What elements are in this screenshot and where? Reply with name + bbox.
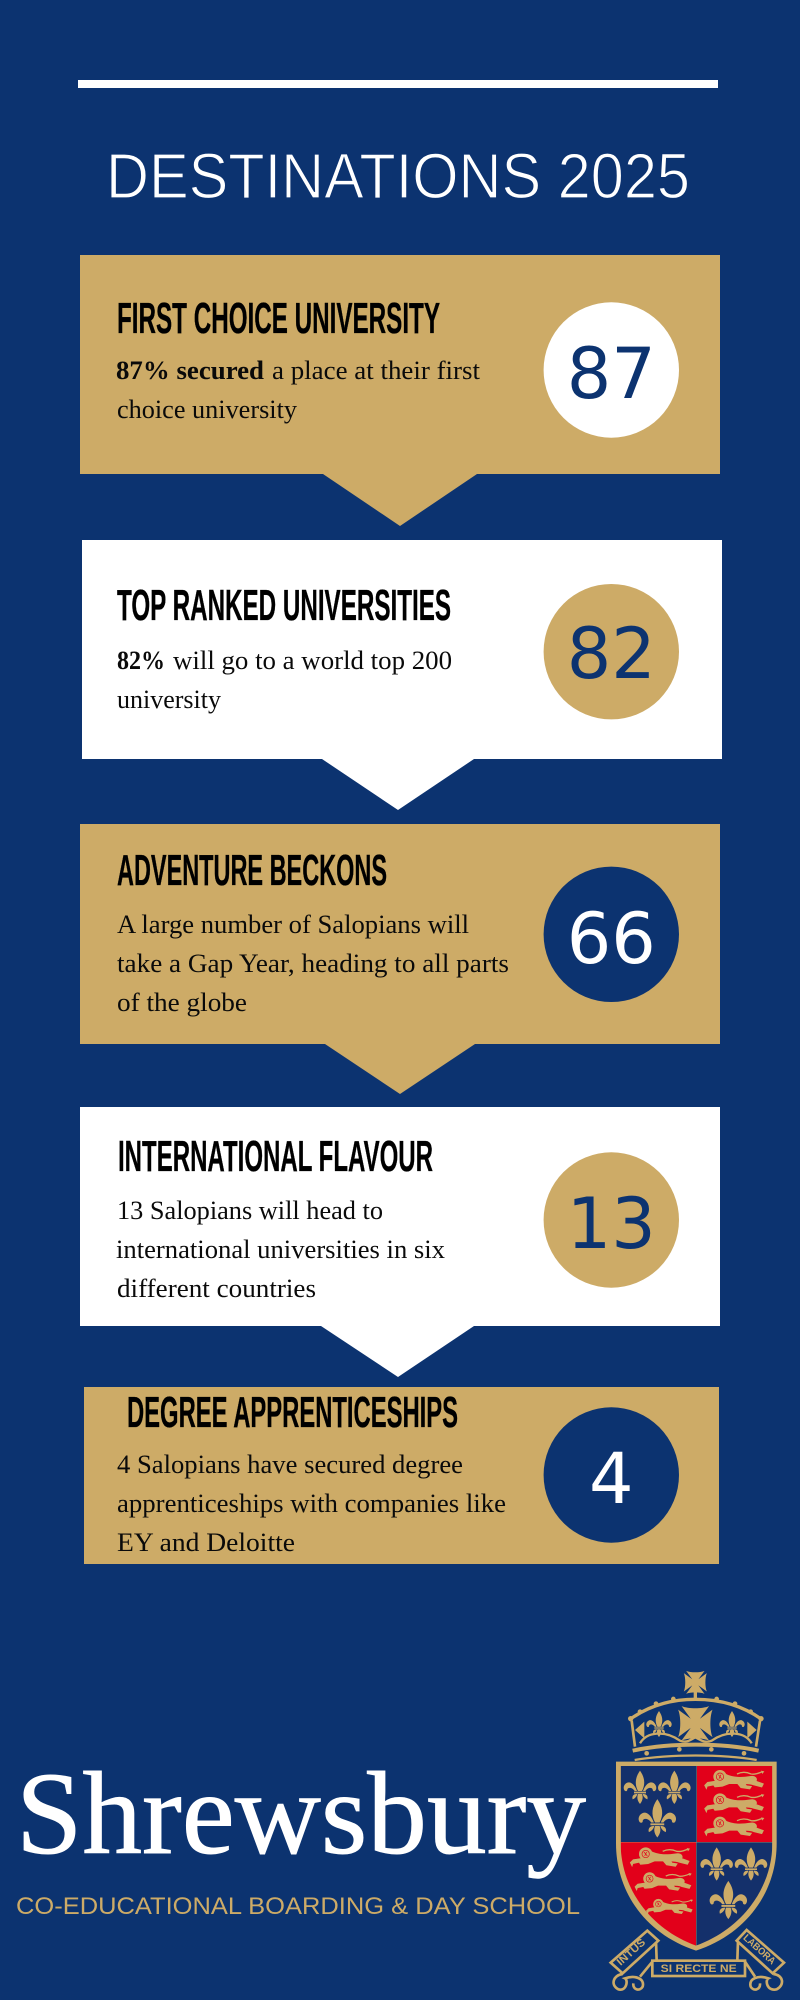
text: first choice description: a place at their first bbox=[272, 356, 481, 385]
stat circle: 66: 66 bbox=[567, 898, 656, 980]
panel: degree apprenticeships bbox=[84, 1387, 719, 1564]
logo wordmark: CO-EDUCATIONAL BOARDING & DAY SCHOOL bbox=[16, 1893, 580, 1920]
text: adventure description: A large number of Salopians will bbox=[117, 910, 469, 939]
panel: international flavour bbox=[80, 1107, 720, 1377]
text: first choice description bbox=[116, 356, 481, 424]
text: apprenticeships description: 4 Salopians have secured degree bbox=[117, 1450, 463, 1479]
icon: school crest bbox=[611, 1671, 784, 1990]
stat circle: 87 bbox=[544, 302, 679, 438]
motto scroll bbox=[611, 1930, 784, 1990]
stat circle: 13 bbox=[544, 1152, 679, 1288]
text: apprenticeships description bbox=[117, 1450, 506, 1557]
text: first choice description: choice university bbox=[117, 395, 297, 424]
text: international description: international universities in six bbox=[116, 1235, 445, 1264]
heading: top ranked universities: TOP RANKED UNIVERSITIES bbox=[117, 581, 451, 630]
motto scroll: LABORA bbox=[741, 1933, 777, 1967]
text: international description: different countries bbox=[117, 1274, 316, 1303]
logo wordmark: Shrewsbury bbox=[16, 1748, 586, 1879]
text: adventure description: of the globe bbox=[117, 988, 247, 1017]
fleurs-de-lis bbox=[624, 1771, 767, 1919]
crown bbox=[628, 1671, 764, 1760]
stat circle: 4 bbox=[544, 1407, 679, 1543]
stat circle: 87: 87 bbox=[567, 333, 656, 415]
shield bbox=[616, 1762, 777, 1951]
text: apprenticeships description: EY and Deloitte bbox=[117, 1528, 295, 1557]
stat circle: 82 bbox=[544, 584, 679, 719]
text: top ranked description: 82% bbox=[117, 646, 165, 675]
text: first choice description: 87% secured bbox=[116, 356, 265, 385]
text: top ranked description bbox=[117, 646, 452, 714]
motto scroll: INTUS bbox=[615, 1937, 648, 1968]
stat circle: 13: 13 bbox=[567, 1183, 656, 1265]
title: DESTINATIONS 2025 bbox=[106, 140, 690, 212]
heading: international flavour: INTERNATIONAL FLAVOUR bbox=[118, 1132, 433, 1181]
panel: adventure beckons bbox=[80, 824, 720, 1094]
panel: first choice university bbox=[80, 255, 720, 526]
stat circle: 66 bbox=[544, 867, 679, 1002]
top rule bbox=[78, 80, 718, 88]
text: international description: 13 Salopians will head to bbox=[117, 1196, 383, 1225]
text: adventure description bbox=[117, 910, 509, 1017]
lions bbox=[631, 1770, 764, 1913]
heading: degree apprenticeships: DEGREE APPRENTICESHIPS bbox=[127, 1388, 458, 1437]
text: apprenticeships description: apprenticeships with companies like bbox=[117, 1489, 506, 1518]
motto scroll: SI RECTE NE bbox=[661, 1963, 737, 1975]
text: top ranked description: university bbox=[117, 685, 221, 714]
text: adventure description: take a Gap Year, heading to all parts bbox=[117, 949, 509, 978]
heading: first choice university: FIRST CHOICE UNIVERSITY bbox=[117, 294, 440, 343]
text: international description bbox=[116, 1196, 445, 1303]
stat circle: 82: 82 bbox=[567, 613, 656, 695]
text: top ranked description: will go to a world top 200 bbox=[173, 646, 452, 675]
stat circle: 4: 4 bbox=[589, 1438, 634, 1520]
heading: adventure beckons: ADVENTURE BECKONS bbox=[117, 846, 387, 895]
panel: top ranked universities bbox=[82, 540, 722, 810]
